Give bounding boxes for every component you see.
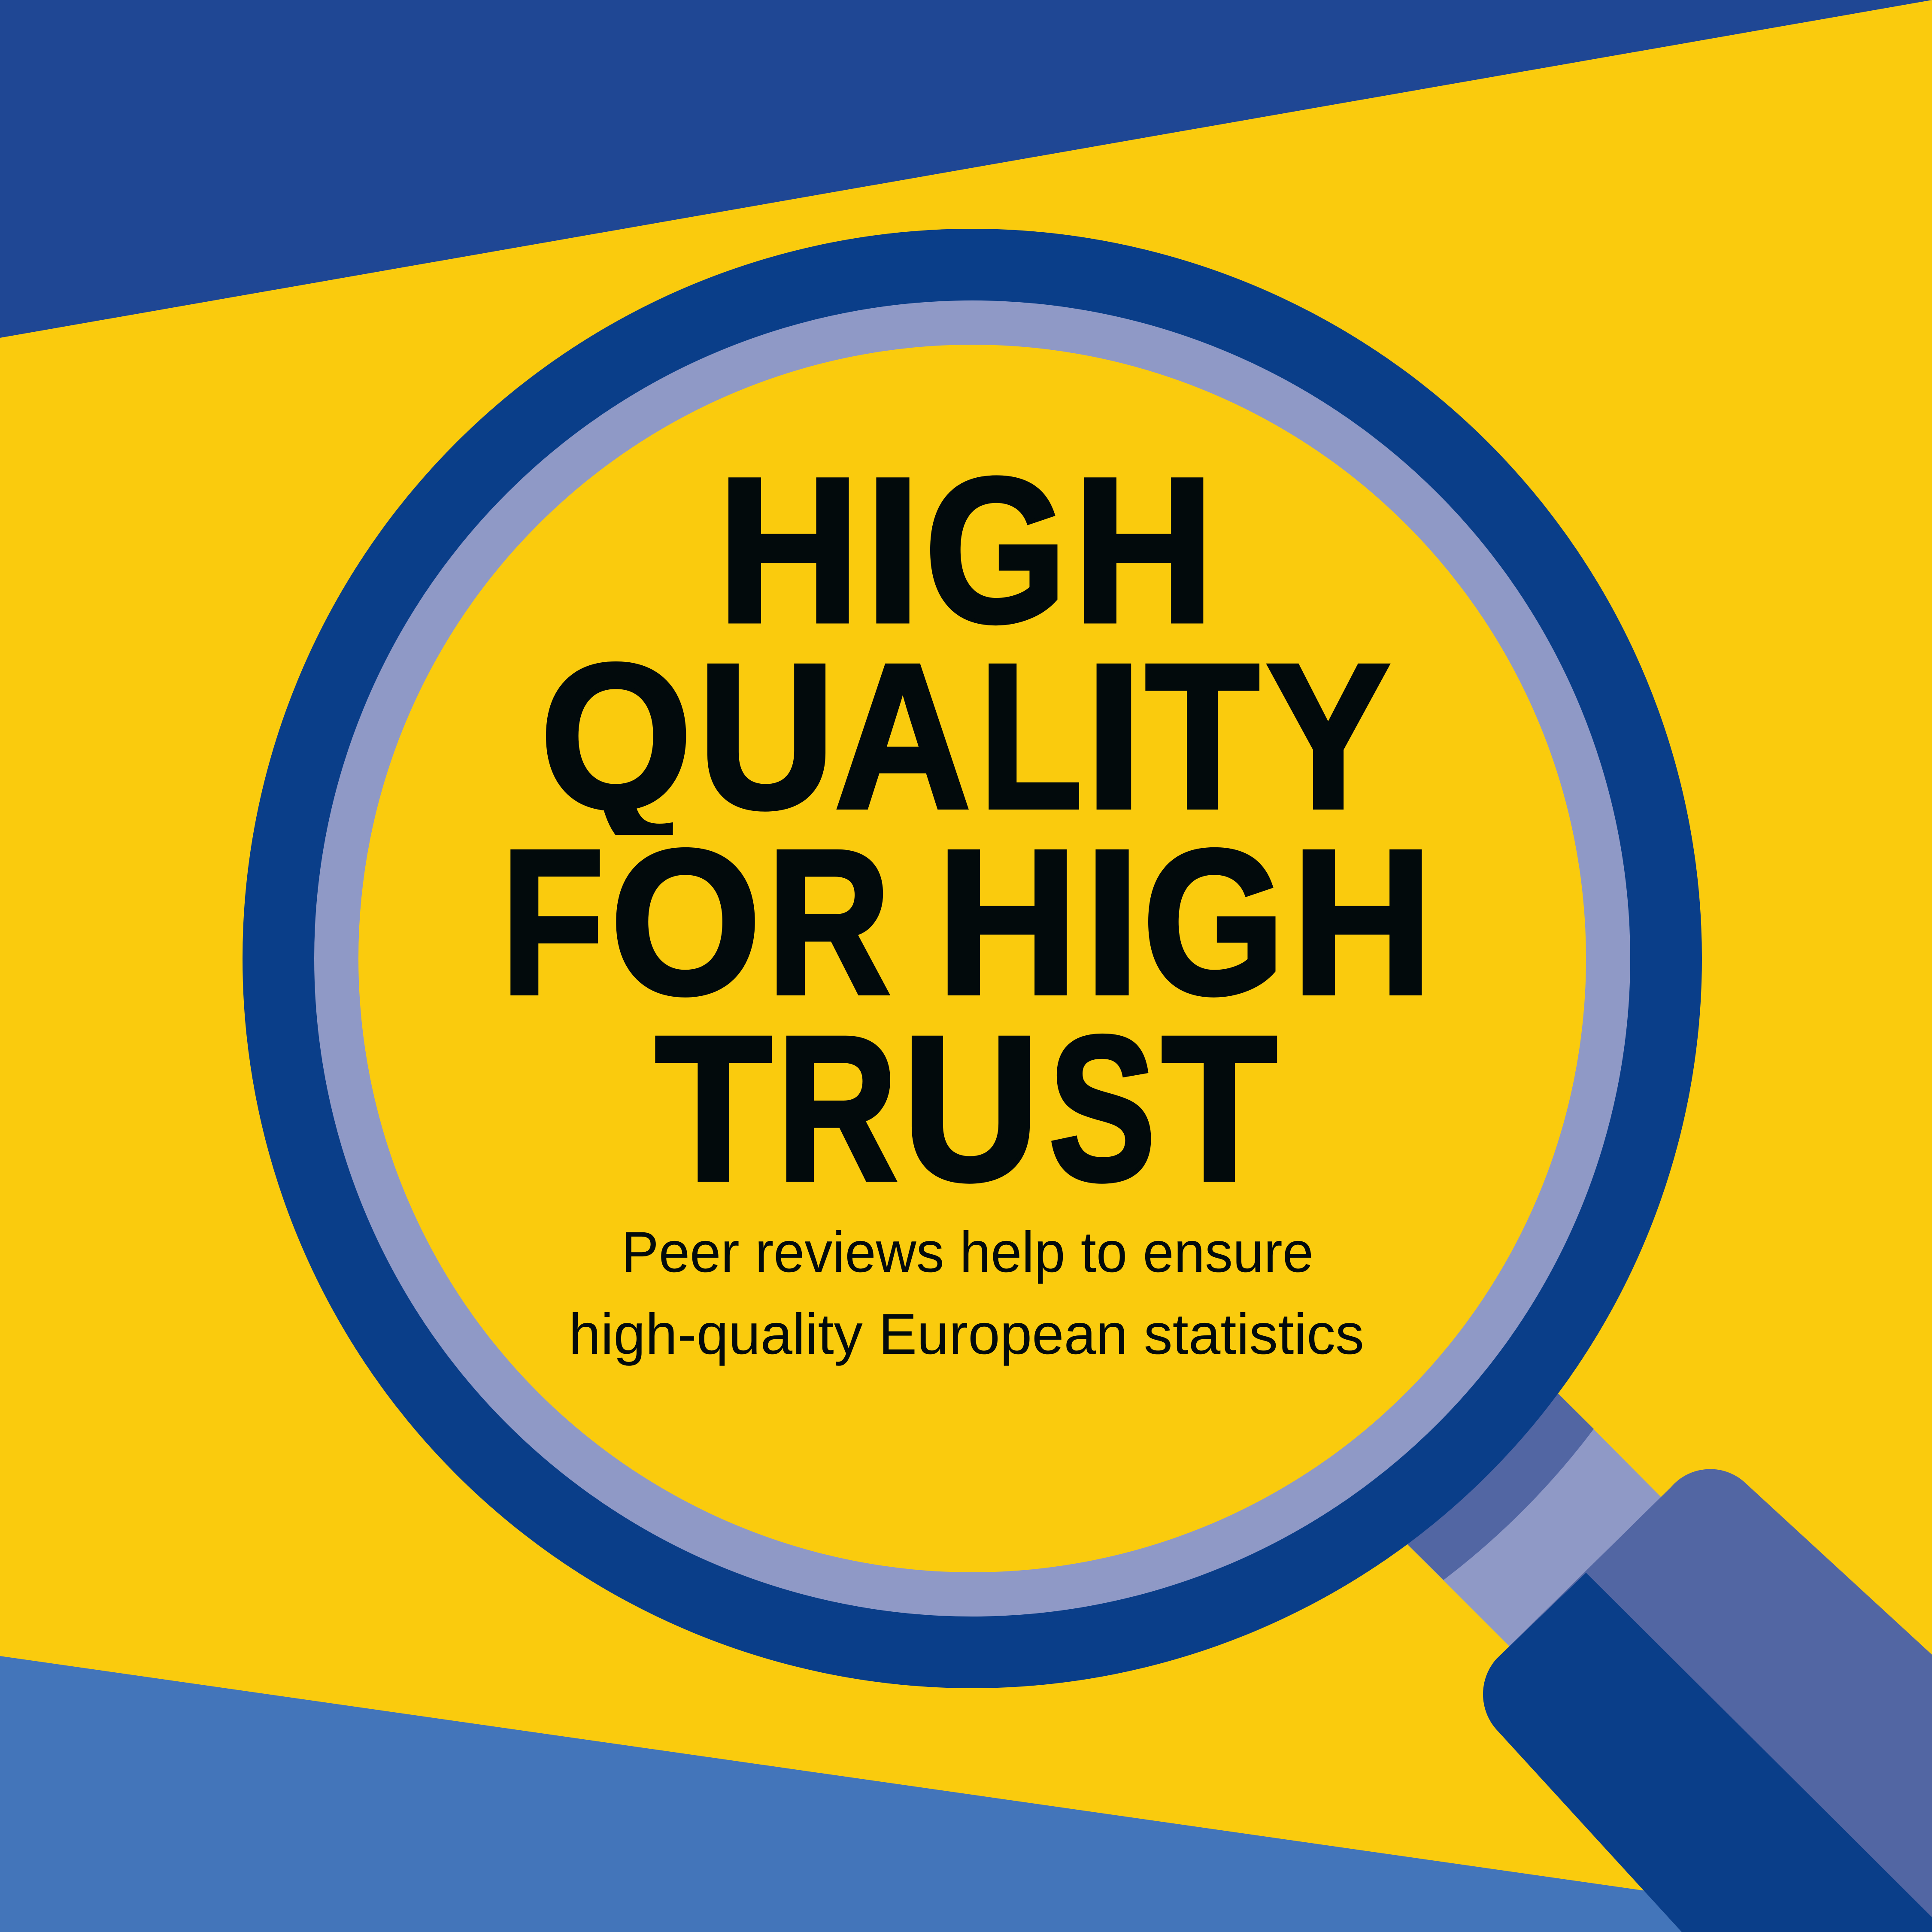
background: top dark blue wedge	[0, 0, 1932, 338]
title: I	[865, 434, 921, 665]
subtitle: Peer reviews help to ensure	[622, 1220, 1313, 1284]
title	[501, 434, 1433, 1223]
title: Q	[540, 621, 692, 851]
title: F	[501, 807, 604, 1037]
subtitle	[569, 1220, 1364, 1366]
title: U	[902, 993, 1040, 1223]
magnifier handle	[1483, 1469, 1932, 1932]
magnifier neck	[1407, 1393, 1661, 1648]
title: H	[1073, 434, 1214, 665]
title: T	[655, 993, 772, 1223]
title: T	[1145, 621, 1259, 851]
icon: magnifying glass	[243, 229, 1932, 1932]
title: H	[717, 434, 860, 665]
title: A	[834, 621, 971, 851]
title: U	[698, 621, 835, 851]
title: L	[979, 621, 1083, 851]
background: bottom light blue wedge	[0, 1656, 1682, 1932]
title: Y	[1266, 621, 1390, 851]
magnifier inner ring	[314, 300, 1630, 1617]
title: T	[1162, 993, 1277, 1223]
title: I	[1084, 807, 1140, 1037]
title: R	[767, 807, 891, 1037]
title: R	[777, 993, 898, 1223]
title: I	[1085, 621, 1143, 851]
title: H	[1292, 807, 1433, 1037]
title: H	[937, 807, 1078, 1037]
title: O	[610, 807, 761, 1037]
title: G	[925, 434, 1067, 665]
magnifier outer ring	[243, 229, 1702, 1688]
magnifier lens	[358, 345, 1586, 1572]
subtitle: high-quality European statistics	[569, 1302, 1364, 1366]
title: S	[1049, 993, 1156, 1223]
title: G	[1143, 807, 1285, 1037]
